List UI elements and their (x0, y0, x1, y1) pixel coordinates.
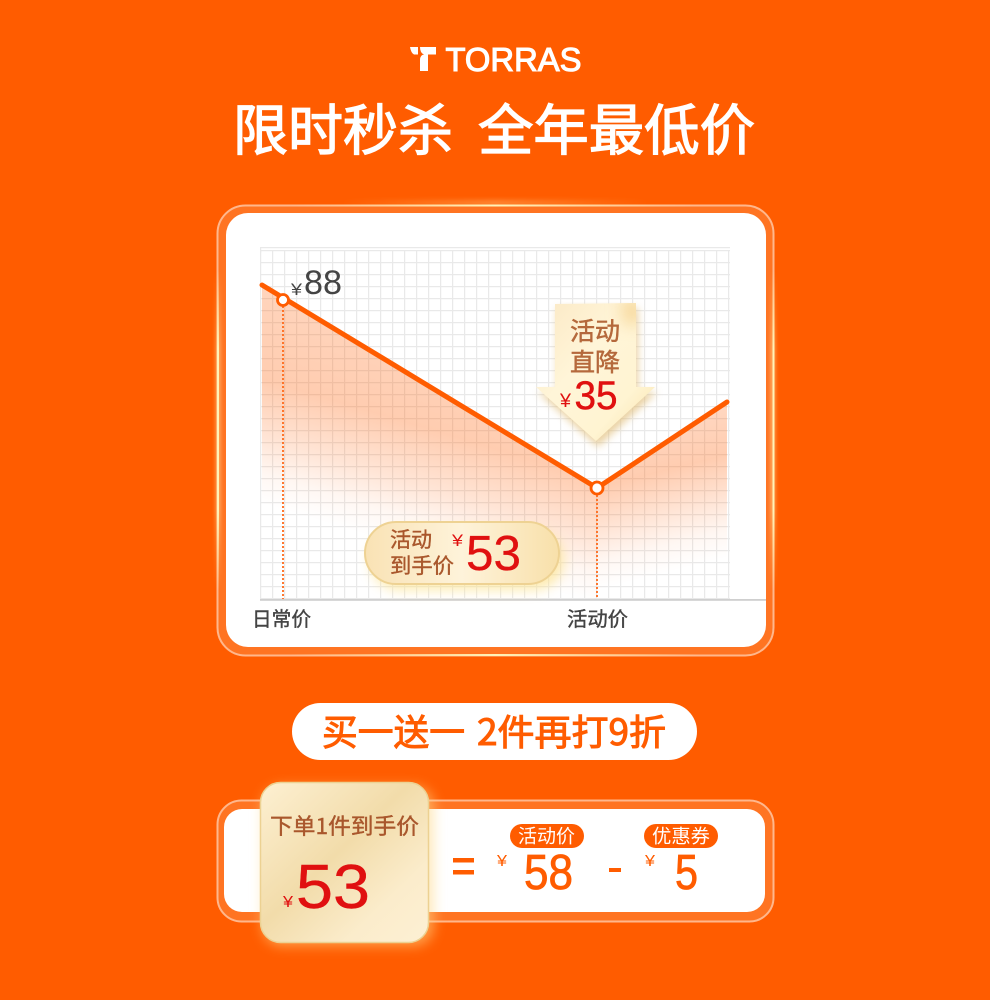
title (233, 86, 755, 166)
badge: promo price (510, 822, 584, 848)
card yen sign: ¥ (282, 894, 293, 911)
panel frame (218, 206, 774, 656)
panel: price chart (215, 200, 776, 656)
frame bottom glow (290, 654, 700, 656)
banner text part 1: 买一送一 (322, 704, 465, 756)
title part 1: 限时秒杀 (233, 86, 453, 166)
frame right glow (772, 270, 774, 590)
icon: T mark (410, 47, 436, 71)
card shadow (262, 786, 434, 946)
grid lines (260, 250, 730, 600)
frame top glow (290, 204, 700, 206)
arrow callout: drop 35 (536, 298, 657, 447)
dotted drop line: promo price (596, 495, 598, 599)
badge pill (510, 824, 584, 848)
pill glow (370, 530, 564, 590)
minus sign (609, 868, 621, 872)
x axis (260, 599, 766, 601)
title part 2: 全年最低价 (478, 86, 755, 166)
area under price line: right (597, 402, 727, 600)
badge: coupon (644, 822, 718, 848)
banner pill (292, 703, 697, 760)
promotion banner (292, 703, 697, 760)
pill text line 2: 到手价 (390, 550, 454, 580)
badge pill (644, 824, 718, 848)
white chart card (226, 213, 766, 647)
arrow yen sign: ¥ (559, 391, 571, 412)
panel: price formula (218, 782, 774, 946)
banner text part 2: 2件再打9折 (477, 704, 666, 756)
dotted drop line: regular price (282, 306, 284, 599)
pill callout: final price 53 (365, 522, 564, 590)
arrow shape (536, 303, 655, 441)
grid left edge (260, 247, 261, 253)
yen sign: 5: ¥ (644, 853, 655, 870)
badge text: 优惠券 (652, 822, 710, 848)
number 58: 58 (524, 846, 573, 900)
frame left glow (217, 270, 219, 590)
number 88: 88 (304, 264, 342, 302)
pill text line 1: 活动 (390, 524, 432, 554)
yen sign: 58: ¥ (496, 853, 507, 870)
pill shape (365, 522, 559, 584)
arrow text line 1: 活动 (570, 312, 620, 348)
arrow top sheen (622, 298, 642, 324)
gold price card (260, 782, 428, 942)
frame left halo (215, 270, 221, 590)
yen sign: ¥ (290, 280, 303, 299)
top halo (340, 200, 650, 206)
pill number: 53 (466, 527, 521, 581)
arrow number: 35 (574, 374, 618, 418)
brand name: TORRAS (446, 41, 582, 78)
chart grid (260, 247, 730, 600)
formula frame (218, 800, 774, 922)
price line (262, 285, 727, 488)
card number: 53 (296, 853, 370, 922)
badge text: 活动价 (518, 822, 575, 848)
marker: promo price (591, 482, 603, 494)
logo: TORRAS (410, 41, 582, 78)
axis label: regular price: 日常价 (252, 603, 311, 632)
number 5: 5 (675, 846, 698, 900)
equals sign (453, 858, 474, 874)
card shape (260, 782, 428, 942)
formula white card (224, 809, 765, 912)
marker: regular price (278, 294, 288, 306)
axis label: promo price: 活动价 (567, 603, 628, 632)
arrow text line 2: 直降 (570, 343, 620, 379)
sheen blob (622, 298, 642, 324)
arrow shadow (538, 308, 657, 447)
area under price line: left (262, 285, 597, 600)
grid top edge (260, 247, 730, 248)
pill yen sign: ¥ (451, 531, 464, 550)
frame right halo (770, 270, 776, 590)
card label: 下单1件到手价 (270, 809, 419, 841)
label: 88 price (290, 264, 342, 302)
